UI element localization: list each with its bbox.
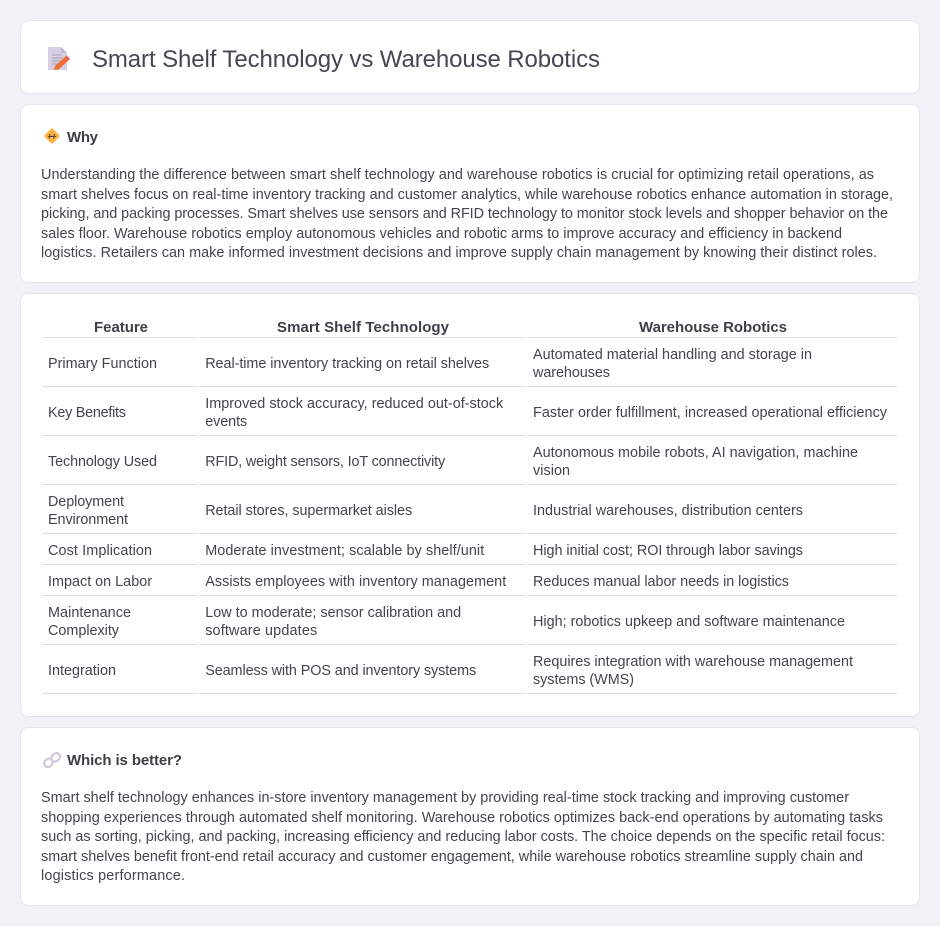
row: primary function: Real-time inventory tracking on retail shelves [205,356,489,372]
row: integration: Integration [48,663,116,679]
row: integration [48,654,853,688]
text: why paragraph [41,167,893,261]
text: why paragraph: picking, and packing processes. Smart shelves use sensors and RFID technology to monitor stock levels and shopper behavior on the [41,206,888,222]
row: primary function: Primary Function [48,356,157,372]
row: deployment environment: Environment [48,512,128,528]
row: primary function: Automated material handling and storage in [533,347,812,363]
row: impact on labor: Assists employees with inventory management [205,574,506,590]
row: impact on labor: Reduces manual labor needs in logistics [533,574,789,590]
row: key benefits [48,396,888,430]
row: primary function: warehouses [532,365,610,381]
row: technology used [48,445,858,479]
row: deployment environment: Deployment [48,494,124,510]
row: technology used: RFID, weight sensors, IoT connectivity [205,454,446,470]
panel: title card [20,20,920,94]
text: why paragraph: smart shelves focus on real-time inventory tracking and customer analytics, while warehouse robotics enhance automation in storage, [41,187,893,203]
text: why paragraph: Understanding the difference between smart shelf technology and warehouse robotics is crucial for optimizing retail operations, as [41,167,874,183]
row: key benefits: Faster order fulfillment, increased operational efficiency [533,405,888,421]
row: integration: systems (WMS) [533,672,634,688]
row: deployment environment: Retail stores, supermarket aisles [205,503,412,519]
row: maintenance complexity: Maintenance [48,605,131,621]
row: maintenance complexity: software updates [205,623,317,639]
row: deployment environment [48,494,803,528]
panel: which is better [20,728,920,906]
text: which is better paragraph: logistics performance. [41,868,185,884]
table header row: Feature [94,319,148,336]
row: integration: Seamless with POS and inventory systems [205,663,476,679]
title: Smart Shelf Technology vs Warehouse Robotics [92,46,600,73]
row: technology used: Autonomous mobile robots, AI navigation, machine [533,445,858,461]
heading: why: Why [67,129,99,146]
row: deployment environment: Industrial warehouses, distribution centers [533,503,803,519]
row: maintenance complexity: Low to moderate; sensor calibration and [205,605,461,621]
table header row: Warehouse Robotics [639,319,787,336]
row: technology used: Technology Used [48,454,157,470]
table header row: Smart Shelf Technology [277,319,450,336]
row: impact on labor [48,574,789,590]
text: which is better paragraph [41,790,885,884]
row: maintenance complexity: High; robotics upkeep and software maintenance [533,614,845,630]
icon: link [43,752,62,769]
row: maintenance complexity [48,605,845,639]
text: which is better paragraph: such as sorting, picking, and packing, increasing efficiency and reducing labor costs. The choice depends on the specific retail focus: [41,829,885,845]
icon: document with pencil [48,47,70,70]
icon: warning diamond [44,128,60,144]
text: which is better paragraph: shopping experiences through automated shelf monitoring. Warehouse robotics optimizes back-end operations by automating tasks [41,810,883,826]
text: why paragraph: sales floor. Warehouse robotics employ autonomous vehicles and robotic arms to improve accuracy and efficiency in backend [41,226,842,242]
text: which is better paragraph: Smart shelf technology enhances in-store inventory management by providing real-time stock tracking and improving customer [41,790,849,806]
text: which is better paragraph: smart shelves benefit front-end retail accuracy and customer engagement, while warehouse robotics streamline supply chain and [41,849,863,865]
row: key benefits: Key Benefits [48,405,126,421]
row: maintenance complexity: Complexity [48,623,120,639]
row: primary function [48,347,812,381]
row: technology used: vision [533,463,570,479]
row: impact on labor: Impact on Labor [48,574,152,590]
heading: which is better: Which is better? [67,752,182,769]
row: cost implication: High initial cost; ROI through labor savings [533,543,803,559]
table header row [94,319,787,336]
panel: comparison table [20,294,920,716]
row: cost implication: Moderate investment; scalable by shelf/unit [205,543,484,559]
row: integration: Requires integration with warehouse management [533,654,853,670]
row: cost implication [48,543,803,559]
row: key benefits: Improved stock accuracy, reduced out-of-stock [205,396,504,412]
panel: why [20,104,920,282]
text: why paragraph: logistics. Retailers can make informed investment decisions and improve supply chain management by knowing their distinct roles. [41,245,877,261]
row: key benefits: events [205,414,247,430]
row: cost implication: Cost Implication [48,543,152,559]
